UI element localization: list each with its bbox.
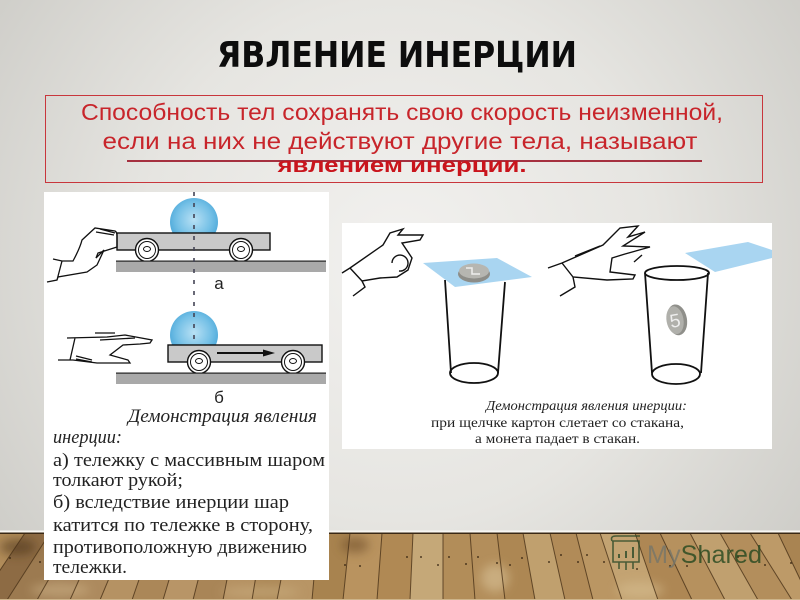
definition box xyxy=(46,96,762,182)
hand a xyxy=(47,228,117,282)
cart b xyxy=(168,345,322,374)
falling coin xyxy=(664,303,690,337)
flying card xyxy=(685,242,772,272)
ball on cart b xyxy=(170,311,218,344)
caption: cart demonstration: катится по тележке в сторону, xyxy=(53,515,313,536)
definition text line 2: если на них не действуют другие тела, называют xyxy=(102,128,698,154)
hand flicking xyxy=(342,229,423,296)
watermark icon xyxy=(612,536,640,570)
watermark: MyShared xyxy=(612,536,762,570)
caption: cart demonstration: тележки. xyxy=(53,557,127,578)
caption: cart demonstration: Демонстрация явления xyxy=(126,406,317,427)
hand after flick xyxy=(548,226,650,296)
caption: cart demonstration: инерции: xyxy=(53,427,122,448)
caption: cart demonstration: а) тележку с массивным шаром xyxy=(53,450,325,471)
caption: cart demonstration: толкают рукой; xyxy=(53,470,183,491)
definition text line 1: Способность тел сохранять свою скорость неизменной, xyxy=(81,99,723,125)
caption: coin demonstration: а монета падает в стакан. xyxy=(475,432,640,447)
hand b xyxy=(58,333,152,363)
caption: coin demonstration: при щелчке картон слетает со стакана, xyxy=(431,416,684,431)
dashed axis xyxy=(193,192,195,342)
caption: cart demonstration: б) вследствие инерции шар xyxy=(53,492,289,513)
coin on card xyxy=(458,264,490,282)
caption: cart demonstration: противоположную движению xyxy=(53,537,307,558)
label a: а xyxy=(214,274,224,293)
caption: coin demonstration: Демонстрация явления инерции: xyxy=(484,399,687,414)
label b: б xyxy=(214,388,224,407)
watermark text: MyShared xyxy=(647,541,762,569)
arrow on cart b xyxy=(217,350,275,356)
ground a xyxy=(116,260,326,272)
glass left xyxy=(445,280,505,383)
ball on cart a xyxy=(170,198,218,232)
wooden floor xyxy=(0,533,800,600)
ground b xyxy=(116,372,326,384)
caption: cart demonstration xyxy=(53,406,325,578)
caption: coin demonstration xyxy=(431,399,687,447)
definition text emphasized: явлением инерции. xyxy=(276,155,526,177)
title: ЯВЛЕНИЕ ИНЕРЦИИ xyxy=(217,35,577,76)
panel: coin and glass demonstration xyxy=(342,223,772,449)
card on glass xyxy=(423,258,532,287)
glass right xyxy=(645,266,709,384)
panel: cart demonstration xyxy=(44,192,329,580)
falling coin: 5 xyxy=(668,310,682,333)
underline rule xyxy=(127,160,702,162)
cart a xyxy=(117,233,270,262)
